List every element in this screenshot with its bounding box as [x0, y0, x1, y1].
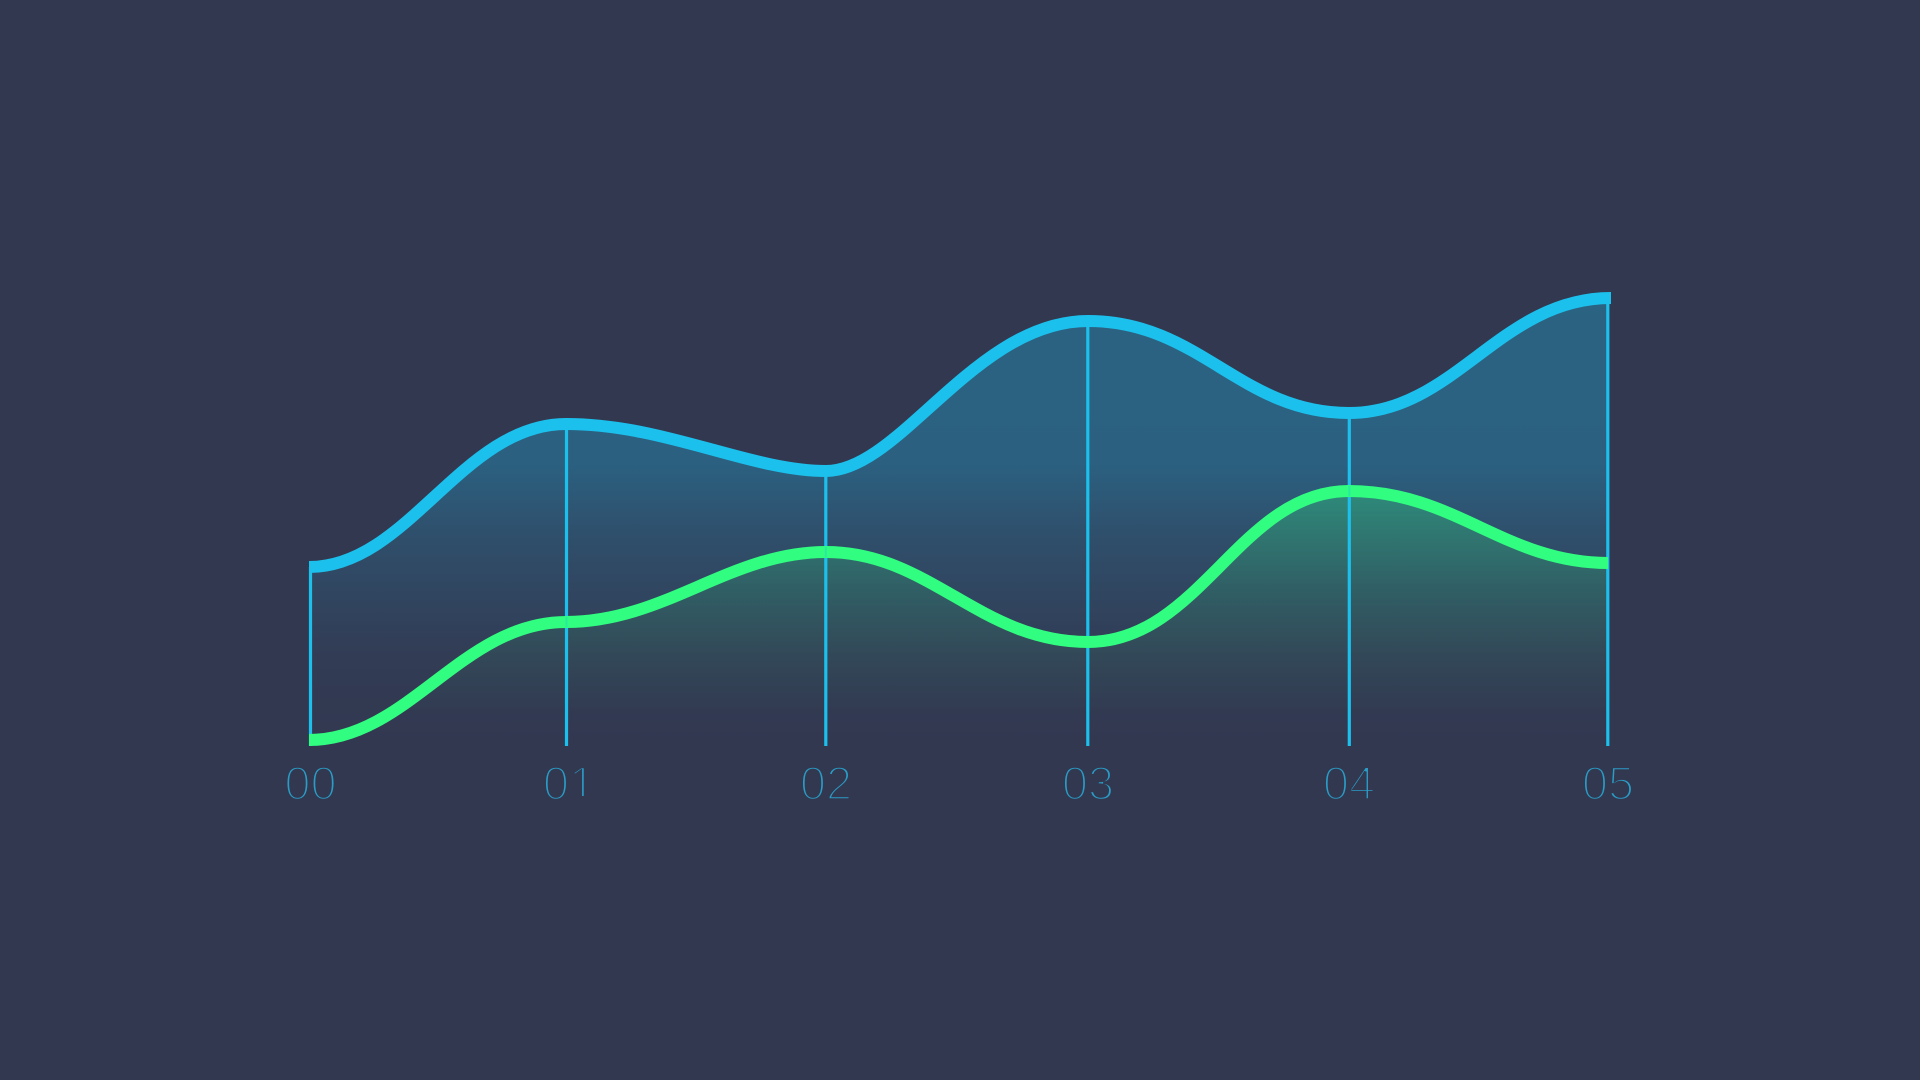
label 00: 00	[284, 756, 337, 810]
label 03: 03	[1062, 756, 1114, 810]
blue data line	[309, 298, 1611, 567]
blue area fill	[310, 298, 1608, 746]
guide lines showing through green line	[566, 486, 1349, 627]
label 04: 04	[1323, 756, 1375, 810]
label 02: 02	[800, 756, 852, 810]
green area fill	[310, 491, 1608, 746]
label 01: 01	[543, 756, 595, 810]
green data line	[309, 491, 1608, 740]
label 05: 05	[1582, 756, 1634, 810]
vertical guide lines	[310, 298, 1608, 746]
axis labels	[284, 756, 1634, 810]
